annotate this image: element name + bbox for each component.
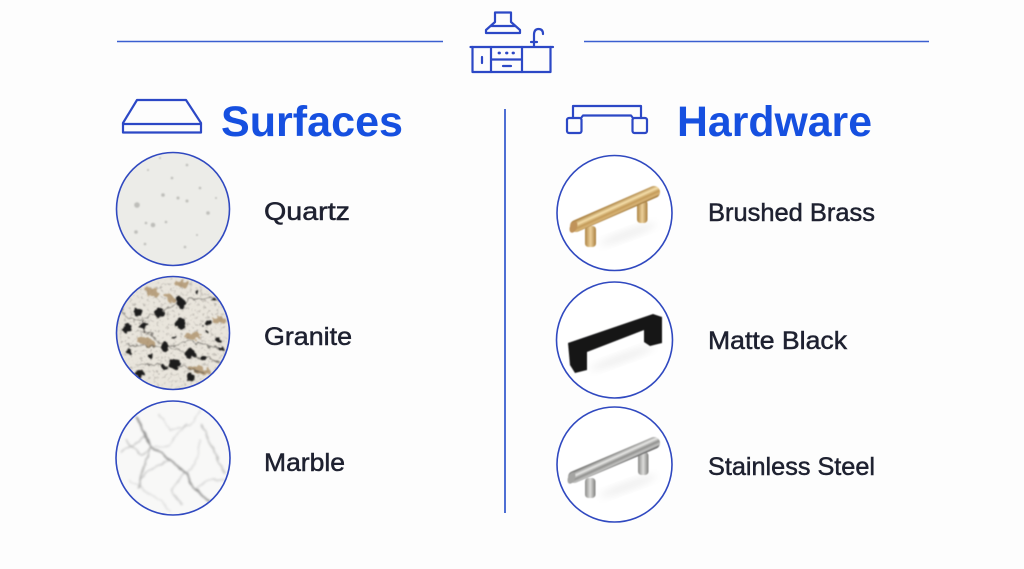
heading: Hardware — [567, 98, 872, 146]
label: Granite: Granite — [264, 323, 352, 351]
label: Stainless Steel: Stainless Steel — [708, 453, 875, 481]
label: Brushed Brass: Brushed Brass — [708, 199, 875, 227]
swatch: marble — [116, 401, 230, 515]
swatch: quartz — [116, 152, 230, 266]
top divider left — [117, 40, 443, 42]
icon: kitchen — [470, 12, 553, 72]
swatch: granite — [116, 276, 230, 390]
swatch: brushed brass handle — [557, 156, 672, 270]
panel: surfaces list — [116, 152, 352, 515]
top divider right — [584, 40, 929, 42]
label: Quartz: Quartz — [264, 198, 350, 226]
center divider — [504, 109, 506, 513]
Hardware title: Hardware — [677, 98, 872, 146]
label: Marble: Marble — [264, 449, 345, 477]
Surfaces title: Surfaces — [221, 98, 403, 146]
heading: Surfaces — [123, 98, 403, 146]
swatch: matte black handle — [556, 282, 672, 398]
panel: hardware list — [556, 156, 875, 522]
icon: countertop slab — [123, 100, 201, 132]
swatch: stainless steel handle — [557, 407, 672, 522]
label: Matte Black: Matte Black — [708, 327, 848, 355]
icon: cabinet handle — [567, 106, 647, 133]
